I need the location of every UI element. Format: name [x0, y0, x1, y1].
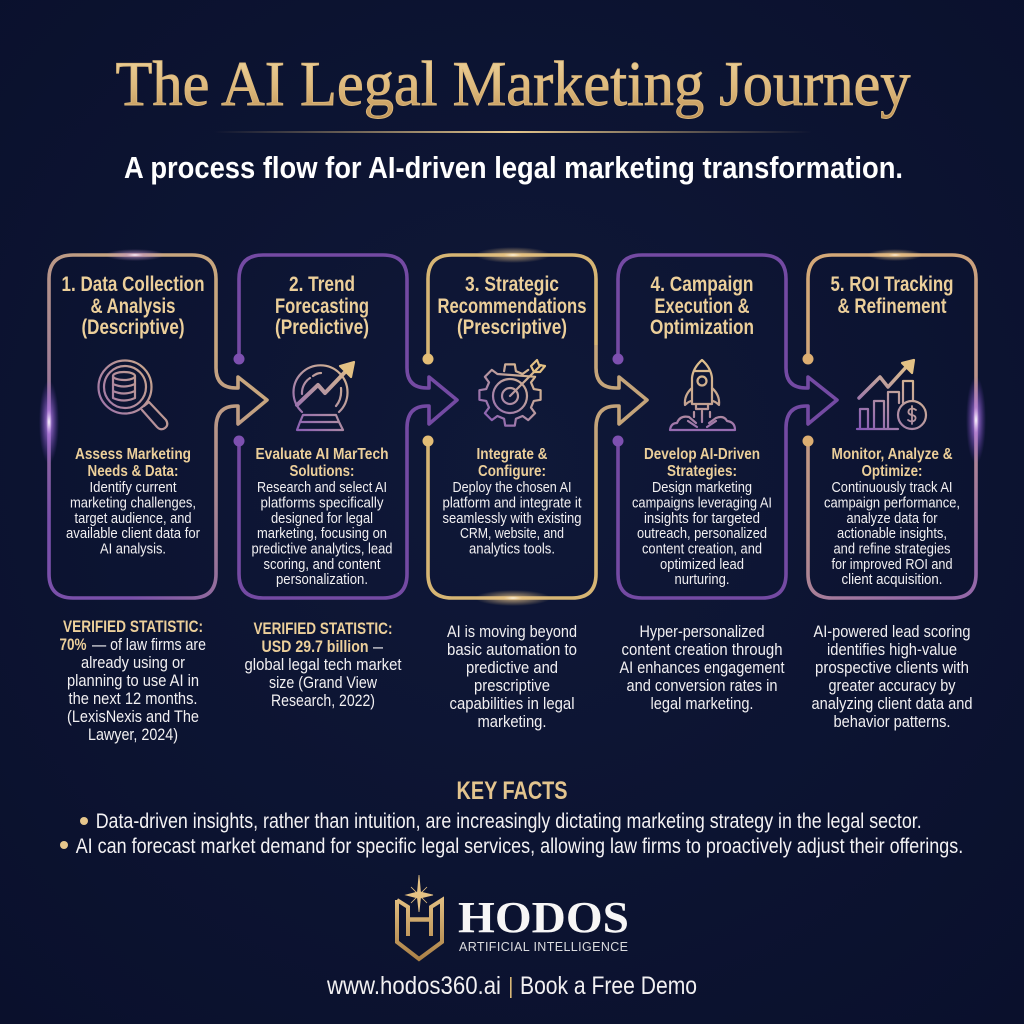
heading: step 3: 3. Strategic: [465, 272, 559, 296]
insight 4: AI enhances engagement: [620, 658, 785, 677]
insight 3: predictive and: [466, 658, 558, 677]
heading: step 2: (Predictive): [275, 315, 369, 339]
logo: Hodos shield and wordmark: ARTIFICIAL INTELLIGENCE: [459, 940, 628, 954]
subheading and body: Integrate &: [476, 446, 548, 463]
statistic 1: already using or: [81, 653, 185, 672]
statistic 1: VERIFIED STATISTIC:: [63, 617, 203, 636]
heading: step 2: Forecasting: [275, 294, 369, 318]
subheading and body: platforms specifically: [260, 494, 384, 512]
connector dots: [802, 354, 814, 446]
footer call to action: www.hodos360.ai: [326, 972, 501, 1000]
subheading and body: Design marketing: [652, 479, 752, 496]
insight 5: prospective clients with: [815, 658, 969, 677]
subheading and body: analyze data for: [846, 510, 938, 527]
subheading and body: for improved ROI and: [832, 556, 952, 573]
panel 2: trend forecasting: [234, 255, 457, 598]
subheading and body: [824, 446, 960, 588]
subheading and body: personalization.: [276, 571, 368, 588]
subheading and body: Needs & Data:: [88, 463, 178, 480]
subheading and body: marketing, focusing on: [257, 525, 387, 542]
logo: Hodos shield and wordmark: [397, 875, 629, 959]
subheading and body: [66, 446, 200, 558]
insight 4: legal marketing.: [650, 694, 754, 713]
subheading and body: predictive analytics, lead: [252, 540, 392, 558]
icon: crystal ball with trend arrow: [294, 362, 354, 430]
panel 4: campaign execution: [612, 255, 837, 598]
subheading and body: nurturing.: [674, 571, 730, 588]
insight 3: AI is moving beyond: [447, 622, 577, 641]
icon: rocket launch: [670, 360, 735, 430]
insight 5: identifies high-value: [827, 640, 957, 659]
statistic 2: size (Grand View: [269, 673, 378, 692]
subheading and body: seamlessly with existing: [442, 510, 582, 527]
icon: magnifier with database: [98, 360, 167, 429]
insight 3: marketing.: [478, 712, 546, 731]
heading: step 4: Execution &: [654, 294, 750, 318]
heading: step 4: 4. Campaign: [650, 272, 754, 296]
subheading and body: Configure:: [478, 463, 546, 480]
subheading and body: Solutions:: [290, 463, 354, 480]
heading: step 5: [830, 272, 954, 318]
insight 4: and conversion rates in: [626, 676, 778, 695]
statistic 2: USD 29.7 billion: [262, 637, 368, 656]
statistic 2: VERIFIED STATISTIC:: [254, 619, 392, 638]
statistic 2: —: [373, 637, 383, 656]
subheading and body: Assess Marketing: [75, 446, 191, 463]
subheading and body: marketing challenges,: [70, 494, 196, 512]
subheading and body: Research and select AI: [257, 479, 387, 496]
subheading and body: Strategies:: [667, 463, 737, 480]
statistic 1: [60, 617, 206, 744]
title: The AI Legal Marketing Journey: [116, 48, 910, 119]
heading: step 2: [275, 272, 369, 339]
key facts list: [60, 810, 963, 858]
subheading and body: [442, 446, 582, 558]
subtitle: A process flow for AI-driven legal marketing transformation.: [124, 150, 903, 185]
subheading and body: Deploy the chosen AI: [452, 479, 572, 496]
subheading and body: outreach, personalized: [637, 525, 767, 542]
insight 3: prescriptive: [474, 676, 550, 695]
footer call to action: Book a Free Demo: [520, 972, 697, 1000]
insight 3: capabilities in legal: [450, 694, 574, 713]
subheading and body: insights for targeted: [644, 510, 760, 527]
statistic 2: Research, 2022): [271, 691, 375, 710]
heading: step 1: 1. Data Collection: [62, 272, 204, 296]
heading: step 2: 2. Trend: [289, 272, 355, 296]
statistic 1: the next 12 months.: [68, 689, 198, 708]
wordmark: HODOS: [458, 893, 629, 942]
footer call to action: [326, 972, 697, 1000]
statistic 2: [244, 619, 402, 710]
subheading and body: [252, 446, 392, 588]
connector dots: [422, 354, 434, 446]
statistic 1: planning to use AI in: [67, 671, 199, 690]
subheading and body: scoring, and content: [264, 556, 381, 573]
subheading and body: analytics tools.: [469, 540, 555, 558]
panel 3: strategic recommendations: [422, 247, 647, 606]
subheading and body: Evaluate AI MarTech: [256, 446, 388, 463]
icon: gold shield with H and star: [397, 875, 442, 959]
subheading and body: Identify current: [90, 479, 177, 496]
heading: step 1: [62, 272, 204, 339]
insight 3: [447, 622, 577, 731]
heading: step 4: [650, 272, 754, 339]
statistic 2: global legal tech market: [244, 655, 402, 674]
insight 5: behavior patterns.: [834, 712, 950, 731]
insight 3: basic automation to: [447, 640, 577, 659]
subheading and body: designed for legal: [271, 510, 373, 527]
subheading and body: actionable insights,: [837, 525, 947, 542]
heading: step 3: [438, 272, 587, 339]
heading: step 5: & Refinement: [838, 294, 946, 318]
subheading and body: AI analysis.: [100, 540, 166, 558]
icon: gear with target and arrow: [479, 360, 545, 426]
subheading and body: Optimize:: [862, 463, 922, 480]
heading: step 1: (Descriptive): [82, 315, 184, 339]
subheading and body: Monitor, Analyze &: [832, 446, 952, 463]
insight 4: [620, 622, 785, 713]
subheading and body: client acquisition.: [842, 571, 942, 588]
insight 5: AI-powered lead scoring: [814, 622, 970, 641]
statistic 1: 70%: [60, 635, 86, 654]
subheading and body: optimized lead: [660, 556, 744, 573]
statistic 1: Lawyer, 2024): [88, 725, 178, 744]
subheading and body: content creation, and: [642, 540, 762, 558]
panel 1: data collection: [39, 249, 267, 598]
subheading and body: and refine strategies: [834, 540, 950, 558]
subheading and body: platform and integrate it: [442, 494, 582, 512]
heading: step 5: 5. ROI Tracking: [830, 272, 954, 296]
statistic 1: (LexisNexis and The: [67, 707, 199, 726]
subheading and body: campaign performance,: [824, 494, 960, 512]
subheading and body: [632, 446, 772, 588]
statistic 1: — of law firms are: [92, 635, 206, 654]
connector dots: [234, 354, 244, 446]
subheading and body: available client data for: [66, 525, 200, 542]
subheading and body: Develop AI-Driven: [644, 446, 760, 463]
insight 4: content creation through: [622, 640, 782, 659]
subheading and body: CRM, website, and: [460, 525, 564, 542]
panel 5: ROI tracking: [802, 249, 986, 598]
subheading and body: target audience, and: [74, 510, 192, 527]
insight 5: greater accuracy by: [828, 676, 956, 695]
key facts heading: KEY FACTS: [456, 777, 568, 805]
icon: rising bars and coin: [857, 360, 926, 429]
heading: step 4: Optimization: [650, 315, 754, 339]
insight 4: Hyper-personalized: [640, 622, 764, 641]
insight 5: [812, 622, 972, 731]
connector dots: [612, 354, 624, 446]
heading: step 3: (Prescriptive): [457, 315, 567, 339]
insight 5: analyzing client data and: [812, 694, 972, 713]
subheading and body: Continuously track AI: [832, 479, 952, 496]
heading: step 1: & Analysis: [90, 294, 176, 318]
heading: step 3: Recommendations: [438, 294, 587, 318]
subheading and body: campaigns leveraging AI: [632, 494, 772, 512]
